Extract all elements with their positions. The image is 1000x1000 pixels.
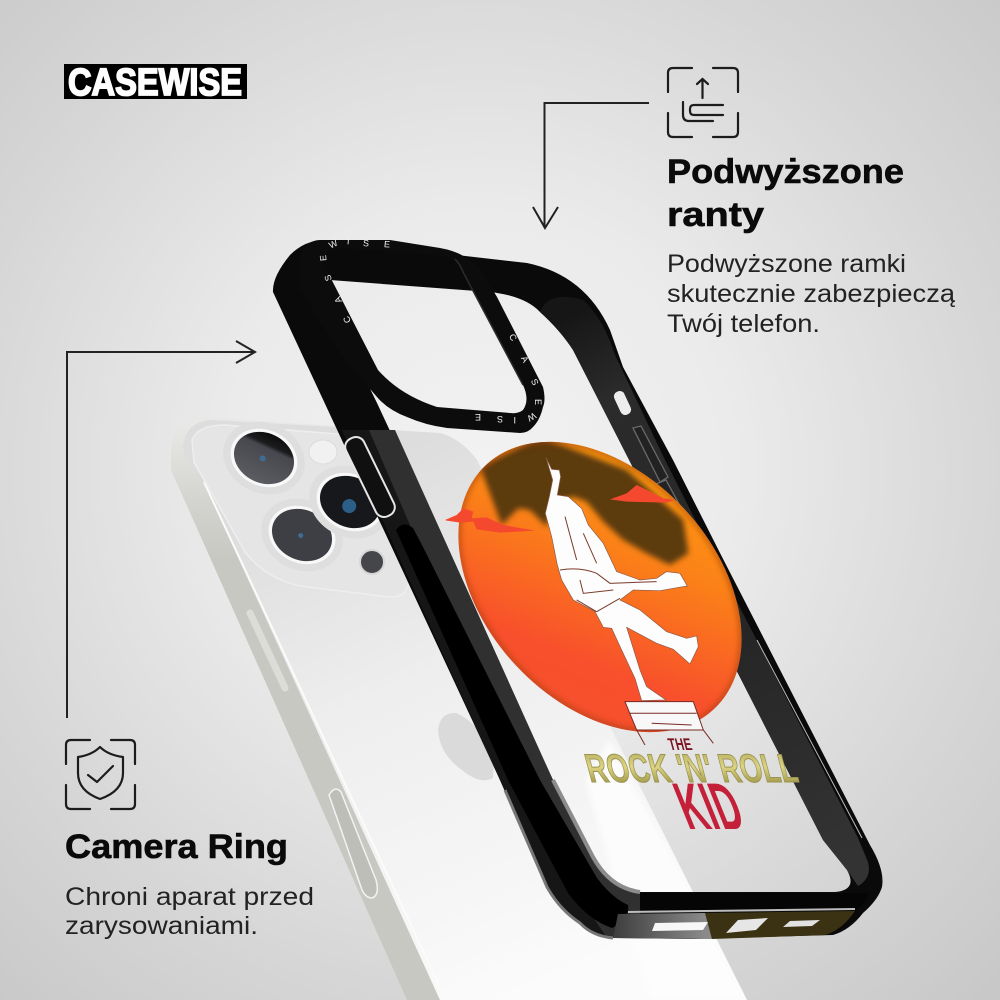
logo: CASEWISE bbox=[68, 62, 242, 104]
bottom wall olive bbox=[705, 911, 855, 939]
kid: KID bbox=[664, 769, 754, 843]
heading: raised edges: Podwyższone bbox=[667, 153, 904, 191]
the: THE bbox=[666, 734, 694, 754]
port: speaker left bbox=[652, 922, 708, 931]
white phone bbox=[171, 409, 747, 1000]
side button upper bbox=[250, 613, 285, 688]
amplifier bbox=[625, 702, 713, 745]
side button outline lower bbox=[656, 480, 692, 533]
right band highlight bbox=[757, 640, 862, 838]
ring lettering top: CASEWISE bbox=[318, 236, 390, 325]
port: speaker right bbox=[783, 920, 820, 927]
lidar bbox=[360, 550, 384, 574]
lens: ultra wide bbox=[249, 486, 355, 584]
left black stripe bbox=[396, 524, 628, 928]
left inner highlight bbox=[553, 780, 640, 892]
sun inner edge bbox=[458, 442, 742, 732]
text: camera ring description: Chroni aparat przed bbox=[65, 883, 314, 911]
ring lettering bottom: CASEWISE bbox=[475, 332, 543, 425]
guitarist bbox=[545, 457, 713, 745]
icon: shield check bbox=[66, 740, 135, 809]
rock n roll: ROCK 'N' ROLL bbox=[580, 746, 802, 791]
phone back face bbox=[183, 420, 747, 1000]
side button outline upper bbox=[633, 426, 668, 482]
lens: tele bbox=[297, 453, 403, 551]
apple logo ghost bbox=[438, 713, 494, 780]
right band bbox=[540, 297, 869, 886]
arrow: camera ring bbox=[67, 341, 255, 718]
lens: main bbox=[211, 409, 317, 507]
text: camera ring description: zarysowaniami. bbox=[65, 912, 258, 940]
phone case bbox=[273, 240, 882, 939]
text: raised edges description: Podwyższone ramki bbox=[667, 250, 906, 278]
volume button bbox=[342, 434, 398, 520]
heading: camera ring: Camera Ring bbox=[65, 828, 288, 866]
text: raised edges description bbox=[667, 250, 955, 338]
heading: raised edges: ranty bbox=[667, 196, 764, 234]
text: raised edges description: skutecznie zabezpieczą bbox=[667, 280, 955, 308]
bottom wall translucent bbox=[613, 913, 712, 939]
flash bbox=[309, 440, 337, 464]
camera plateau bbox=[192, 425, 409, 597]
sun disc bbox=[402, 386, 798, 788]
printed artwork bbox=[445, 442, 800, 829]
side button lower bbox=[329, 789, 377, 898]
dark smoke bbox=[480, 437, 688, 565]
text: raised edges description: Twój telefon. bbox=[667, 310, 820, 338]
heading: raised edges bbox=[667, 153, 904, 234]
clouds bbox=[445, 485, 675, 533]
icon: raised edges bbox=[668, 68, 738, 137]
notch bbox=[612, 389, 633, 417]
left band translucent bbox=[342, 430, 640, 938]
arrow: top feature bbox=[533, 103, 649, 228]
camera ring bbox=[300, 236, 544, 433]
bottom strip bbox=[640, 893, 868, 910]
text: camera ring description bbox=[65, 883, 314, 940]
port: usb bbox=[726, 918, 768, 933]
